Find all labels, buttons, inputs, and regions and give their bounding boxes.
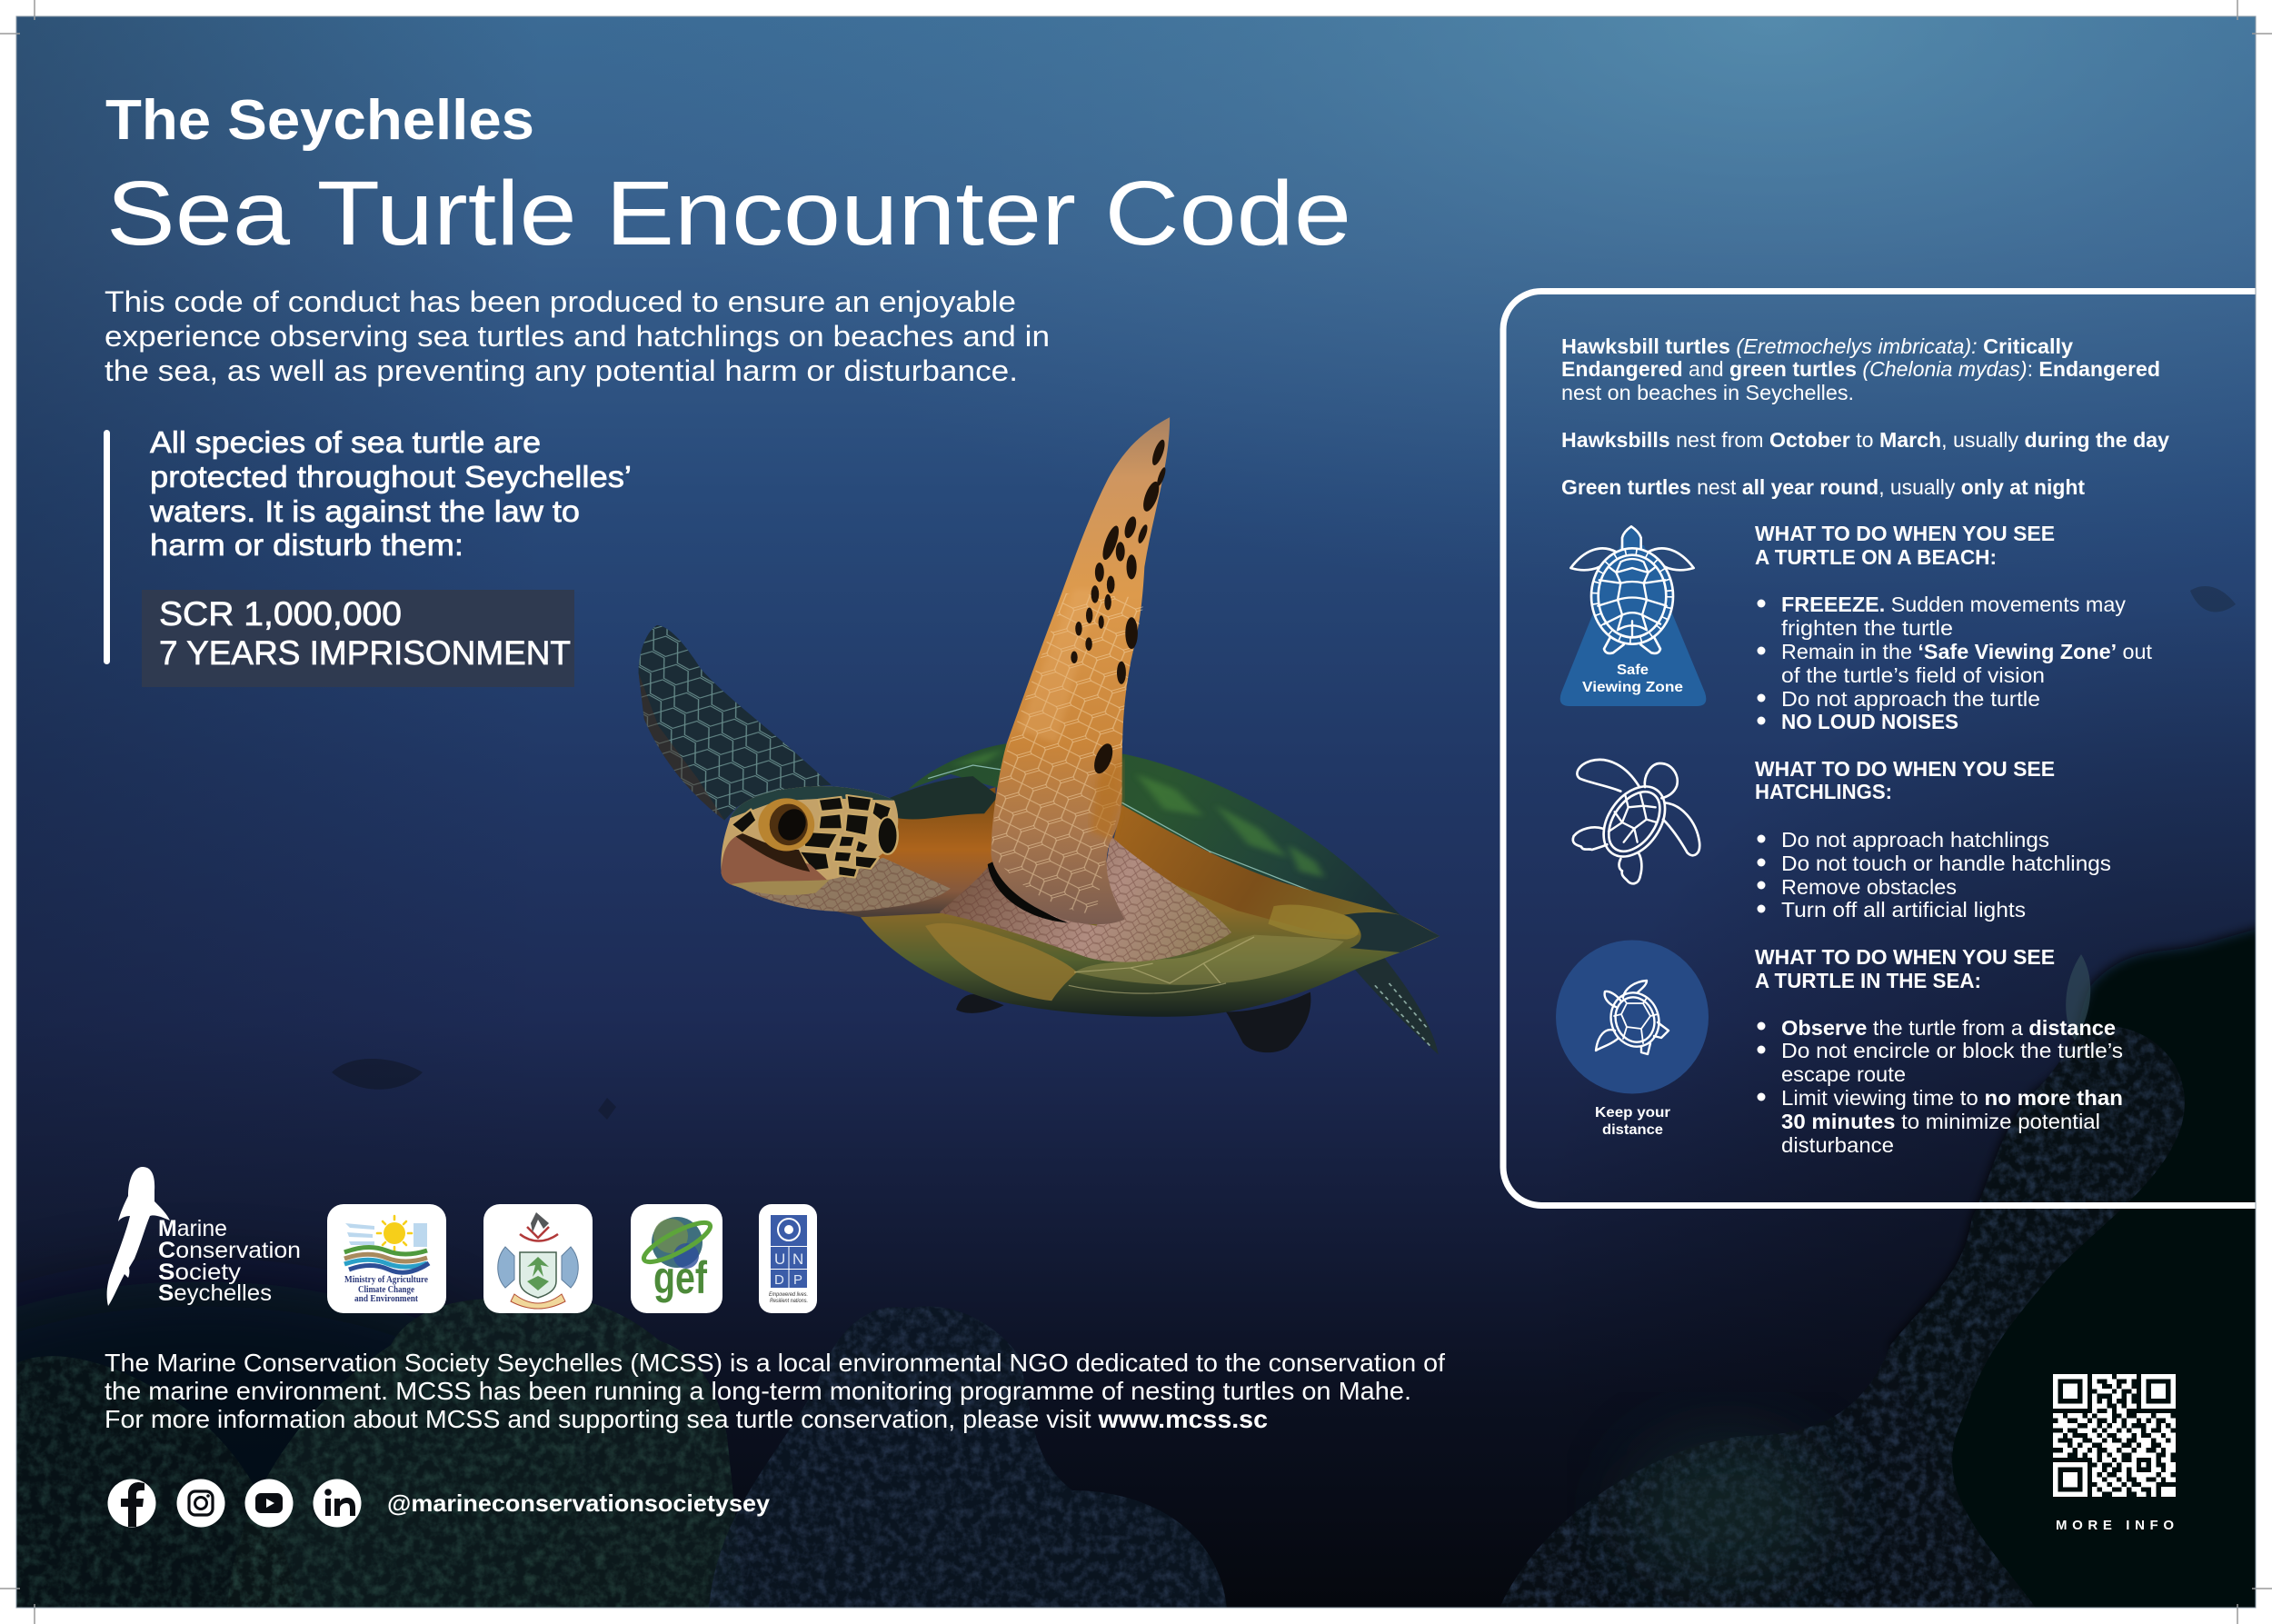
- shield: [520, 1252, 556, 1298]
- title: The Seychelles: The Seychelles: [105, 89, 534, 152]
- crest: [520, 1227, 558, 1241]
- logo: GEF: [631, 1204, 722, 1313]
- title block: [105, 89, 1351, 264]
- logo: UNDP: [759, 1204, 817, 1313]
- icon: linkedin: [313, 1480, 362, 1527]
- carapace: [909, 743, 1400, 915]
- guidance: turtle in the sea: disturbance: [1781, 1133, 1894, 1157]
- ministry name: and Environment: [354, 1294, 419, 1304]
- panel: species and guidance: [1503, 291, 2256, 1205]
- penalty box: [142, 590, 574, 687]
- legal protection callout: [104, 425, 632, 687]
- distance circle: [1556, 940, 1709, 1094]
- panel border: [1503, 291, 2256, 1205]
- globe: [652, 1217, 703, 1268]
- waves: [344, 1247, 429, 1272]
- small turtle: [1596, 981, 1669, 1054]
- MCSS wordmark: Marine: [158, 1216, 227, 1241]
- guidance: turtle in the sea: Do not encircle or block the turtle’s: [1781, 1039, 2123, 1062]
- icon: facebook: [107, 1480, 156, 1527]
- head scales: [732, 795, 898, 878]
- ministry name: [344, 1275, 429, 1304]
- social icons: [107, 1480, 362, 1527]
- UNDP tagline: [769, 1291, 808, 1304]
- plastron: [861, 875, 1440, 1017]
- guidance: turtle in the sea: A TURTLE IN THE SEA:: [1755, 969, 1981, 992]
- about MCSS paragraph: The Marine Conservation Society Seychelles (MCSS) is a local environmental NGO dedicated to the conservation of: [105, 1349, 1445, 1377]
- icon: keep your distance: [1556, 940, 1709, 1138]
- guidance: hatchlings: [1755, 757, 2111, 922]
- reef: teal glints: [1627, 1436, 1827, 1581]
- guidance: turtle on beach: FREEEZE. Sudden movements may: [1781, 593, 2127, 616]
- logo: Seychelles coat of arms: [483, 1204, 593, 1313]
- fish: faint upper right: [2190, 586, 2236, 612]
- plastron yellow scute: [925, 923, 1077, 1001]
- guidance: turtle in the sea: Limit viewing time to no more than: [1781, 1086, 2123, 1110]
- distance label: distance: [1602, 1122, 1663, 1138]
- guidance: turtle on beach: [1755, 522, 2153, 733]
- U N cells: [771, 1247, 807, 1288]
- social handle: @marineconservationsocietysey: [387, 1489, 771, 1517]
- gef wordmark: gef: [653, 1252, 707, 1303]
- fish: panel right: [2066, 954, 2090, 1041]
- guidance: hatchlings: Remove obstacles: [1781, 875, 1957, 899]
- sea turtle photo illustration: [639, 417, 1440, 1054]
- guidance: hatchlings: Do not approach hatchlings: [1781, 828, 2049, 852]
- palm: [527, 1257, 549, 1290]
- MCSS wordmark: Conservation: [158, 1238, 301, 1263]
- about MCSS paragraph: [105, 1349, 1445, 1433]
- safe zone wedge: [1560, 545, 1706, 706]
- penalty box: SCR 1,000,000: [159, 595, 402, 633]
- guidance: turtle in the sea: escape route: [1781, 1062, 1906, 1086]
- armpit shadow: [988, 860, 1069, 923]
- coral: left low reef: [16, 1356, 254, 1607]
- QR code: [2053, 1377, 2176, 1494]
- species status text: Hawksbills nest from October to March, usually during the day: [1561, 428, 2169, 452]
- icon: whale shark: [107, 1167, 170, 1306]
- far flipper with net pattern: [639, 625, 832, 821]
- callout text: All species of sea turtle are: [150, 425, 541, 459]
- head: [721, 786, 898, 895]
- penalty box: 7 YEARS IMPRISONMENT: [159, 634, 571, 672]
- about MCSS paragraph: the marine environment. MCSS has been running a long-term monitoring programme of nesting turtles on Mahe.: [105, 1377, 1411, 1405]
- ministry name: Climate Change: [358, 1285, 414, 1295]
- snout dark band: [736, 833, 810, 872]
- MCSS wordmark: Seychelles: [158, 1280, 272, 1306]
- icon: safe viewing zone: [1560, 526, 1706, 706]
- callout text: [149, 425, 632, 562]
- safe zone label: [1582, 663, 1683, 695]
- guidance: turtle in the sea: Observe the turtle from a distance: [1781, 1016, 2116, 1040]
- small far hind fin: [956, 994, 1004, 1013]
- rock: mottled reef lower right: [1500, 1026, 2185, 1608]
- coral: centre blue colony: [709, 1306, 1227, 1608]
- callout text: harm or disturb them:: [150, 528, 463, 562]
- intro paragraph: experience observing sea turtles and hatchlings on beaches and in: [105, 320, 1050, 353]
- UN emblem: [771, 1215, 807, 1246]
- icon: youtube: [245, 1480, 293, 1527]
- shoulder skin: [940, 836, 1231, 962]
- guidance: turtle on beach: of the turtle’s field of vision: [1781, 663, 2045, 687]
- guidance: turtle on beach: Do not approach the turtle: [1781, 687, 2040, 711]
- MCSS wordmark: [158, 1216, 301, 1306]
- guidance: hatchlings: Do not touch or handle hatchlings: [1781, 852, 2111, 875]
- guidance: turtle on beach: A TURTLE ON A BEACH:: [1755, 545, 1997, 569]
- U N cells: D: [774, 1272, 784, 1288]
- jaw line: [732, 880, 830, 895]
- guidance: turtle in the sea: [1755, 945, 2123, 1157]
- callout text: protected throughout Seychelles’: [150, 460, 632, 493]
- snout: [722, 833, 827, 888]
- distance label: [1595, 1105, 1670, 1138]
- coral: left green colony: [227, 1295, 745, 1608]
- green orbit: [640, 1216, 714, 1269]
- guidance: turtle in the sea: WHAT TO DO WHEN YOU SEE: [1755, 945, 2055, 969]
- safe zone label: Safe: [1617, 663, 1649, 678]
- tail flipper: [1350, 957, 1439, 1054]
- motto ribbon: [511, 1294, 565, 1309]
- guidance: turtle in the sea: 30 minutes to minimize potential: [1781, 1110, 2100, 1133]
- guidance: turtle on beach: Remain in the ‘Safe Viewing Zone’ out: [1781, 640, 2153, 663]
- icon: instagram: [176, 1480, 225, 1527]
- intro paragraph: [105, 285, 1050, 387]
- callout text: waters. It is against the law to: [149, 494, 580, 528]
- species status text: Hawksbill turtles (Eretmochelys imbricata): Critically: [1561, 334, 2073, 358]
- QR caption: MORE INFO: [2056, 1518, 2174, 1533]
- flipper dark spots: [1071, 439, 1167, 775]
- guidance: turtle on beach: WHAT TO DO WHEN YOU SEE: [1755, 522, 2055, 545]
- guidance: hatchlings: WHAT TO DO WHEN YOU SEE: [1755, 757, 2055, 781]
- turtle top view: [1570, 526, 1694, 653]
- U N cells: N: [792, 1250, 803, 1268]
- swordfish supporters: [498, 1247, 578, 1288]
- species status text: [1561, 334, 2169, 499]
- neck: [832, 787, 1041, 917]
- sky stripes: [345, 1223, 427, 1247]
- about MCSS paragraph: For more information about MCSS and supporting sea turtle conservation, please visit www.mcss.sc: [105, 1405, 1268, 1433]
- fish: small left: [332, 1059, 423, 1090]
- plastron rear scutes: [1069, 935, 1344, 993]
- species status text: Green turtles nest all year round, usually only at night: [1561, 475, 2085, 499]
- distance label: Keep your: [1595, 1105, 1670, 1121]
- sun: [377, 1216, 412, 1250]
- logo: Marine Conservation Society Seychelles: [107, 1167, 301, 1306]
- logo: Ministry of Agriculture, Climate Change and Environment: [327, 1204, 446, 1313]
- intro paragraph: This code of conduct has been produced to ensure an enjoyable: [105, 285, 1016, 318]
- title: Sea Turtle Encounter Code: Sea Turtle Encounter Code: [106, 163, 1351, 264]
- front flipper: [991, 417, 1170, 924]
- guidance: turtle on beach: frighten the turtle: [1781, 616, 1953, 640]
- U N cells: P: [793, 1272, 802, 1288]
- icon: hatchling: [1573, 760, 1699, 883]
- MCSS wordmark: Society: [158, 1260, 242, 1285]
- shell yellow rim: [1268, 905, 1359, 939]
- guidance: hatchlings: Turn off all artificial lights: [1781, 898, 2026, 922]
- rock: right cliff black mass: [1888, 923, 2256, 1480]
- UNDP tagline: Resilient nations.: [770, 1298, 808, 1304]
- throat: [742, 858, 951, 912]
- guidance: turtle on beach: NO LOUD NOISES: [1781, 710, 1958, 733]
- rear paddle: [1226, 992, 1310, 1052]
- species status text: Endangered and green turtles (Chelonia mydas): Endangered: [1561, 357, 2160, 381]
- reef shadow lower left: [16, 1256, 412, 1469]
- guidance: hatchlings: HATCHLINGS:: [1755, 780, 1892, 803]
- UNDP tagline: Empowered lives.: [769, 1291, 808, 1298]
- side shell band: [1113, 805, 1440, 937]
- eye: [758, 798, 814, 852]
- U N cells: U: [774, 1250, 785, 1268]
- dark top of neck: [889, 776, 998, 820]
- ministry name: Ministry of Agriculture: [344, 1275, 429, 1285]
- callout bar: [104, 430, 110, 664]
- shell rear dark cap: [1344, 912, 1440, 952]
- fish: small centre: [598, 1098, 616, 1120]
- intro paragraph: the sea, as well as preventing any potential harm or disturbance.: [105, 354, 1018, 387]
- safe zone label: Viewing Zone: [1582, 680, 1683, 695]
- species status text: nest on beaches in Seychelles.: [1561, 381, 1854, 404]
